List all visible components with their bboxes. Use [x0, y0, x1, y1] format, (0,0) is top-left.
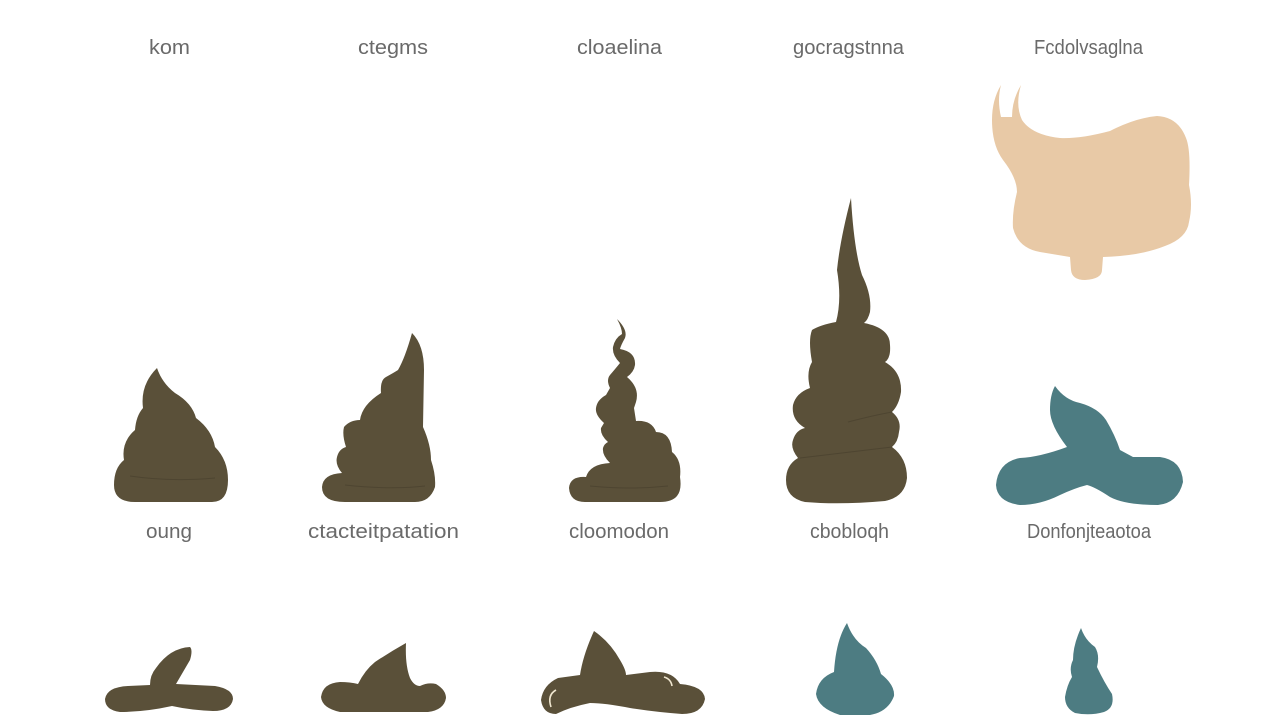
bottom label row — [146, 521, 1152, 543]
icon: pile 4 tall swirl — [786, 198, 907, 503]
top label row — [149, 37, 1144, 59]
label: column 1 top: kom — [149, 37, 190, 59]
label: column 4 bottom: cbobloqh — [810, 521, 889, 543]
icon: teal drop 2 — [1065, 628, 1113, 714]
label: column 5 bottom: Donfonjteaotoa — [1027, 521, 1152, 543]
label: column 2 bottom: ctacteitpatation — [308, 521, 459, 543]
label: column 3 bottom: cloomodon — [569, 521, 669, 543]
icon: flat shape 1 — [105, 647, 233, 712]
label: column 3 top: cloaelina — [577, 37, 663, 59]
icon: pile 3 swirl — [569, 319, 681, 502]
icon: pile 1 — [114, 368, 228, 502]
icon: flat shape 3 with highlights — [541, 631, 705, 714]
icon: teal tail shape — [996, 386, 1183, 505]
label: column 5 top: Fcdolvsaglna — [1034, 37, 1144, 59]
icon: teal drop 1 — [816, 623, 894, 715]
icon: beige intestine shape — [992, 85, 1191, 280]
icon: flat shape 2 — [321, 643, 446, 712]
icon: pile 2 — [322, 333, 435, 502]
label: column 1 bottom: oung — [146, 521, 192, 543]
label: column 2 top: ctegms — [358, 37, 428, 59]
label: column 4 top: gocragstnna — [793, 37, 905, 59]
